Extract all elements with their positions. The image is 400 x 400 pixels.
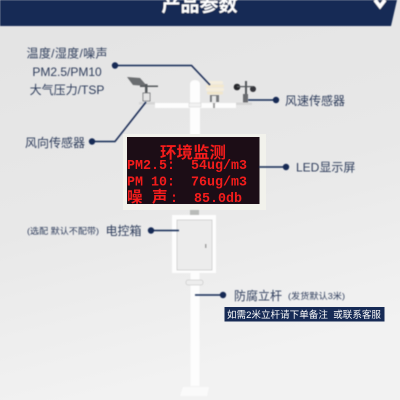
callout: anticorrosion pole: 防腐立杆 bbox=[234, 288, 282, 303]
header band bbox=[0, 0, 397, 26]
climate labels: 大气压力/TSP bbox=[30, 82, 104, 97]
leader bbox=[115, 66, 210, 85]
control box and lower pole bbox=[172, 210, 216, 396]
box door bbox=[177, 220, 212, 270]
callout: control box: 电控箱 bbox=[106, 223, 142, 238]
box lock bbox=[205, 244, 206, 248]
callout: anticorrosion pole: (发货默认3米) bbox=[288, 291, 345, 301]
crossarm bbox=[155, 103, 236, 108]
base plate bbox=[180, 387, 209, 396]
upper pole bbox=[190, 80, 200, 135]
LED line noise value: : 85.0db bbox=[170, 191, 242, 207]
climate labels bbox=[26, 46, 108, 97]
callout: wind speed sensor: 风速传感器 bbox=[285, 93, 345, 108]
icon: wind vane sensor bbox=[127, 77, 158, 104]
callout: wind direction sensor: 风向传感器 bbox=[25, 135, 85, 150]
climate labels: 温度/湿度/噪声 bbox=[26, 46, 108, 60]
icon: louvered multi-sensor shield bbox=[206, 81, 224, 108]
LED frame bbox=[123, 134, 266, 210]
box outer frame bbox=[172, 215, 216, 273]
LED heading: 环境监测 bbox=[160, 143, 226, 162]
callout: LED display bbox=[259, 160, 355, 174]
mount bracket bbox=[190, 210, 199, 215]
callout: wind speed sensor bbox=[248, 93, 345, 108]
LED line noise: 噪 bbox=[127, 188, 143, 206]
note banner: 如需2米立杆请下单备注 或联系客服 bbox=[227, 309, 381, 321]
LED display bbox=[123, 134, 266, 210]
callout: control box bbox=[27, 223, 179, 238]
LED line PM2.5: PM2.5: 54ug/m3 bbox=[127, 158, 247, 174]
callout: anticorrosion pole bbox=[195, 288, 345, 303]
pole flange bbox=[186, 280, 203, 285]
callout: control box: (选配 默认不配带) bbox=[27, 226, 99, 236]
icon: cup anemometer bbox=[234, 81, 256, 105]
climate labels: PM2.5/PM10 bbox=[32, 65, 102, 79]
callout: wind direction sensor bbox=[25, 102, 146, 150]
station pole and sensors bbox=[127, 77, 256, 135]
callout: LED display: LED显示屏 bbox=[296, 160, 355, 174]
LED screen bbox=[127, 137, 260, 204]
lower pole bbox=[190, 273, 200, 386]
icon: chevron bbox=[375, 0, 385, 6]
pole clamp bbox=[189, 103, 201, 107]
callout: climate sensors bbox=[26, 46, 210, 97]
LED line noise second character: 声 bbox=[152, 188, 168, 206]
LED line PM10: PM 10: 76ug/m3 bbox=[127, 174, 247, 190]
